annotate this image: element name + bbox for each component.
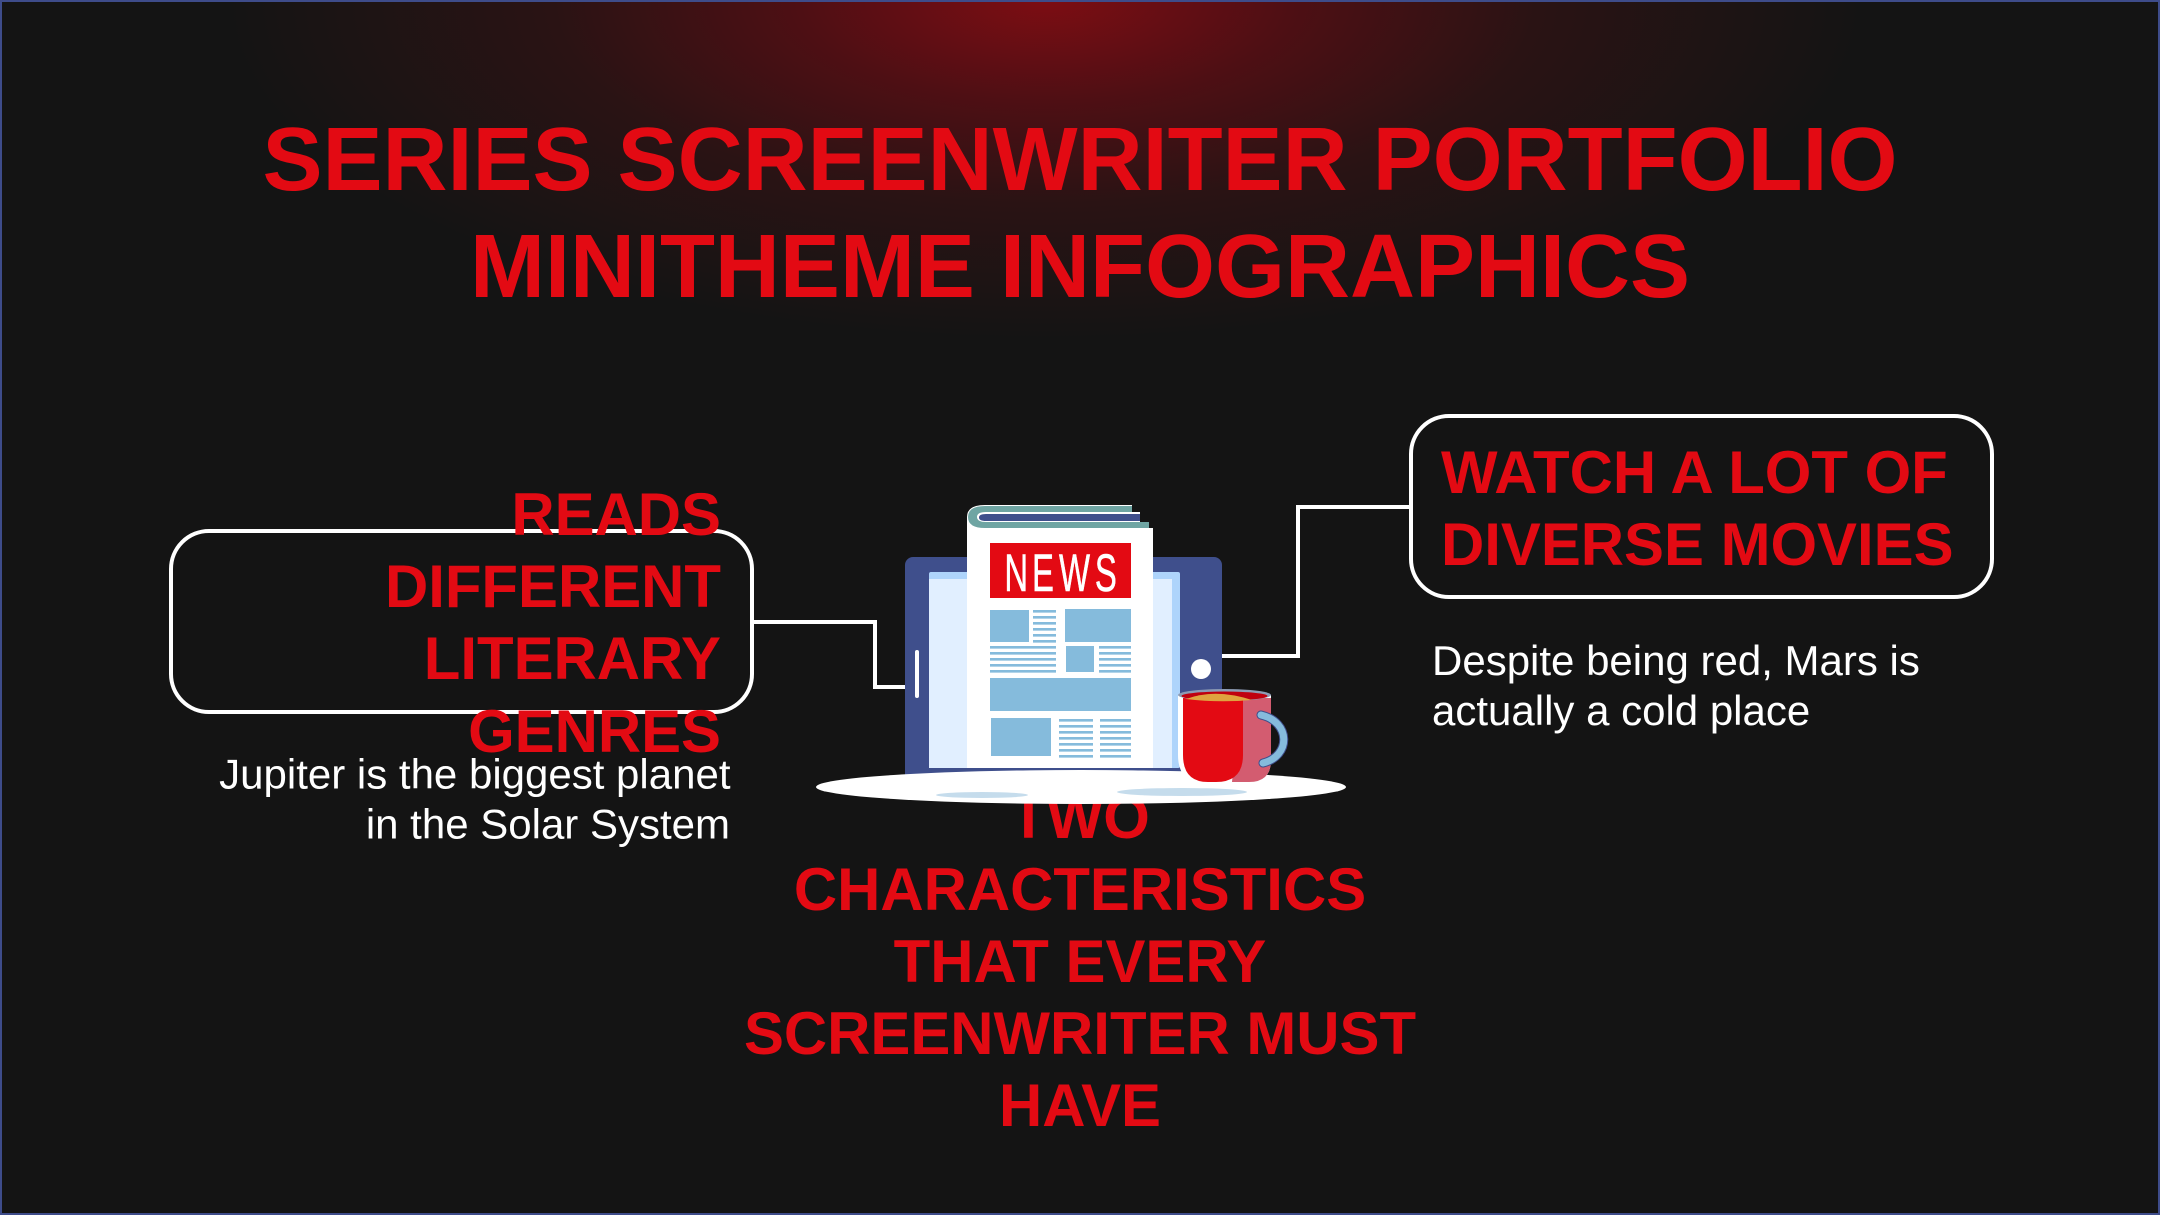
left heading: LITERARY	[424, 625, 721, 692]
left heading: GENRES	[468, 698, 721, 765]
right heading: WATCH A LOT OF	[1441, 439, 1948, 506]
left description: Jupiter is the biggest planet	[219, 750, 731, 798]
mug	[1178, 689, 1284, 782]
title: SERIES SCREENWRITER PORTFOLIO	[262, 110, 1898, 210]
central heading: TWO	[1010, 784, 1150, 851]
right heading: DIVERSE MOVIES	[1441, 511, 1954, 578]
left heading: READS	[511, 481, 721, 548]
news banner: NEWS	[1004, 544, 1117, 603]
newspaper	[967, 505, 1153, 768]
left heading: DIFFERENT	[385, 553, 721, 620]
plate	[816, 770, 1346, 804]
connector: right box to tablet	[1222, 507, 1410, 656]
right description: actually a cold place	[1432, 687, 1810, 734]
panel: left outlined box	[171, 531, 752, 712]
title	[262, 110, 1898, 317]
right description: Despite being red, Mars is	[1432, 637, 1920, 684]
right heading	[1441, 439, 1954, 578]
left heading	[385, 481, 721, 765]
right description	[1432, 637, 1920, 734]
panel: right outlined box	[1411, 416, 1992, 597]
connector: left box to tablet	[752, 622, 905, 687]
icon: news illustration	[816, 505, 1346, 804]
central heading: HAVE	[999, 1072, 1161, 1139]
article blocks	[990, 609, 1131, 758]
central heading: SCREENWRITER MUST	[744, 1000, 1416, 1067]
title: MINITHEME INFOGRAPHICS	[470, 217, 1690, 317]
tablet	[905, 557, 1222, 782]
central heading: CHARACTERISTICS	[794, 856, 1366, 923]
left description: in the Solar System	[366, 800, 730, 848]
central heading: THAT EVERY	[894, 928, 1266, 995]
central heading	[744, 784, 1416, 1139]
left description	[219, 750, 731, 848]
